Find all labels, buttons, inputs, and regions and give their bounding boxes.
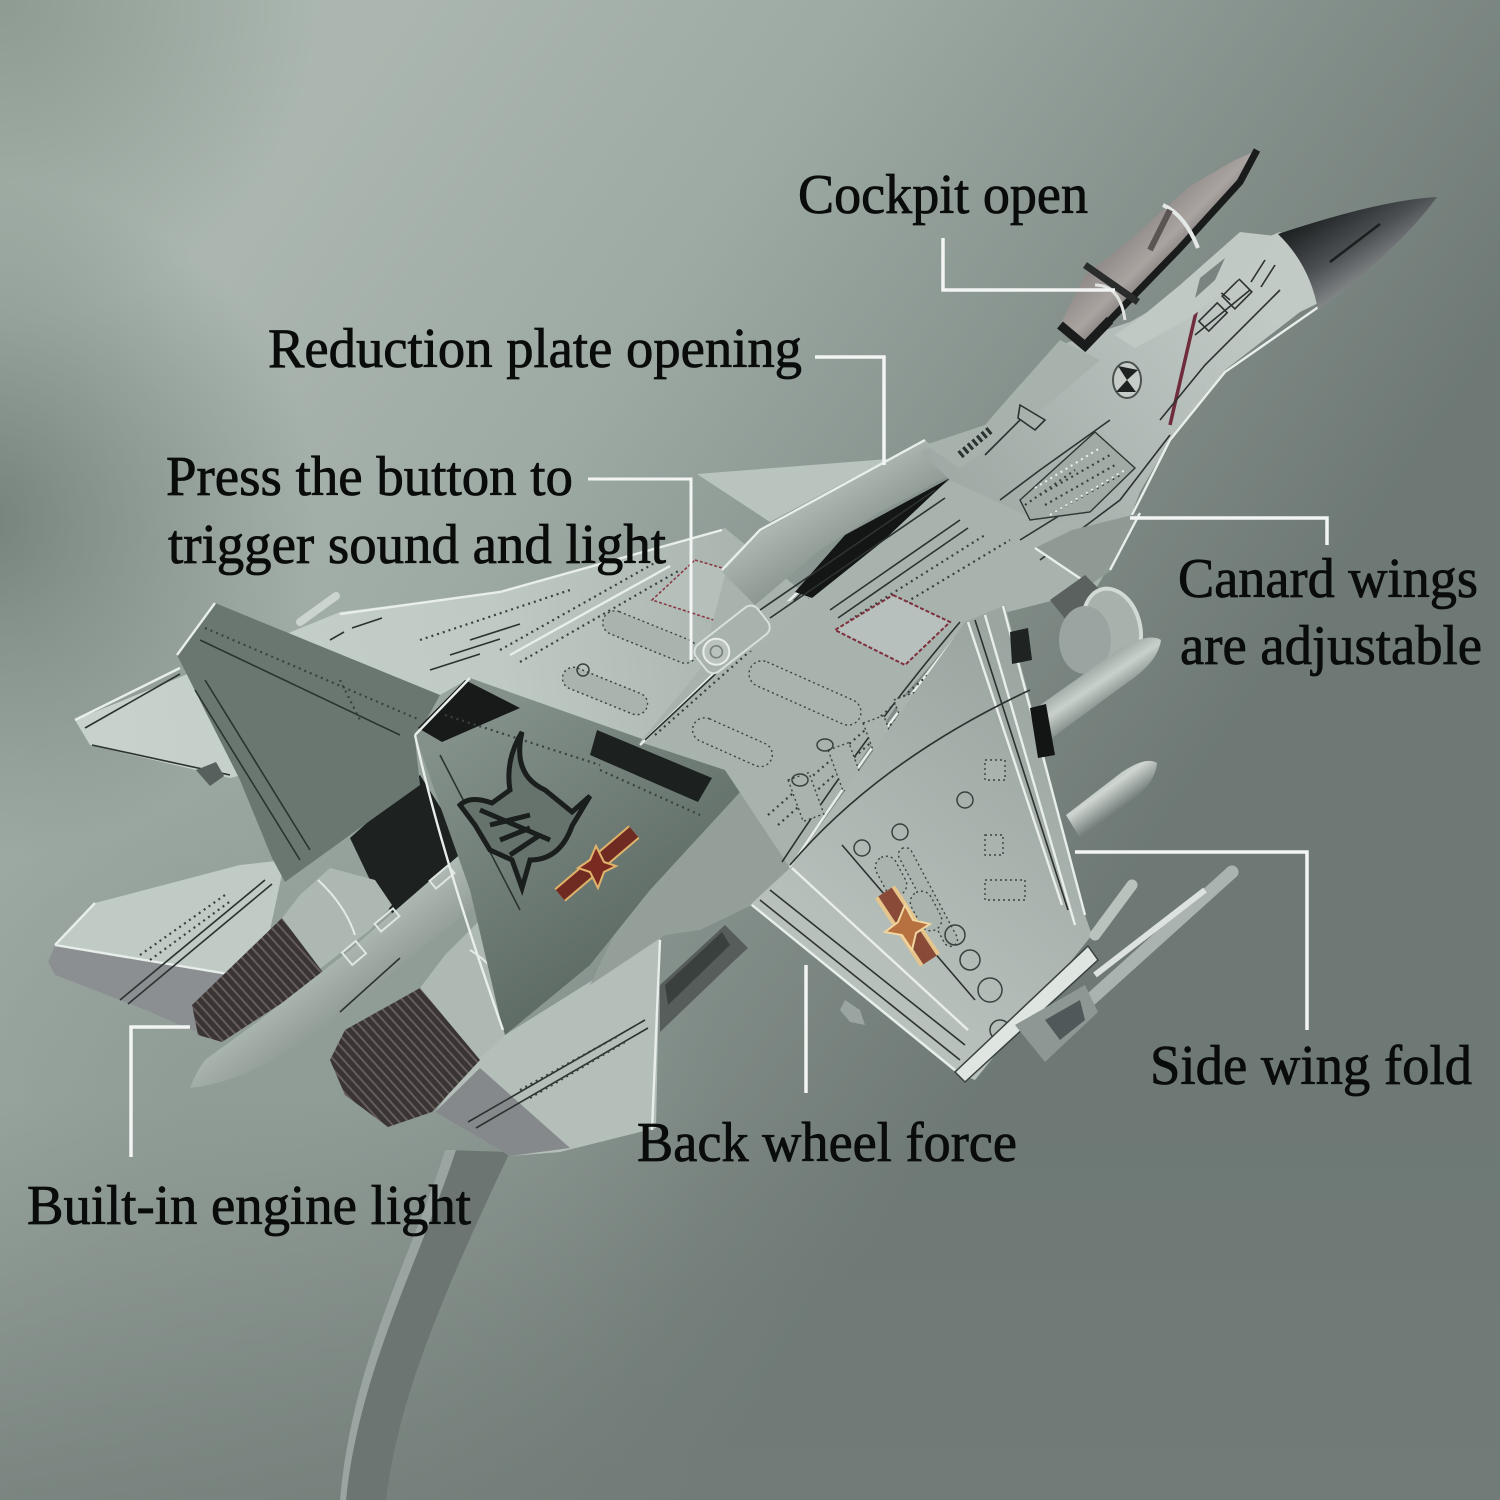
callout: canard wings: are adjustable bbox=[1180, 615, 1482, 677]
shark emblem bbox=[460, 732, 590, 888]
under-wing dark box bbox=[660, 925, 748, 1032]
right engine exhaust bbox=[330, 988, 480, 1127]
dark engine bay bbox=[350, 775, 480, 925]
left wing bbox=[75, 528, 800, 778]
landing gear and wheel bbox=[1050, 575, 1149, 674]
callout: built-in engine light: Built-in engine light bbox=[27, 1175, 471, 1237]
fuselage roundel bbox=[1113, 362, 1141, 398]
callout: cockpit open bbox=[798, 164, 1115, 290]
missile lower bbox=[1066, 761, 1157, 838]
red star insignia bbox=[560, 832, 634, 895]
callout: cockpit open: Cockpit open bbox=[798, 164, 1088, 226]
right engine nacelle bbox=[420, 920, 535, 1060]
callout: press the button bbox=[166, 446, 691, 660]
callout: press the button: trigger sound and light bbox=[168, 514, 666, 576]
callout: canard wings bbox=[1130, 518, 1482, 677]
open cockpit canopy bbox=[1060, 150, 1275, 348]
left stabilizer bbox=[48, 860, 285, 1032]
wing star insignia bbox=[885, 892, 930, 960]
callout: side wing fold: Side wing fold bbox=[1150, 1035, 1472, 1097]
wingtip missile rail bbox=[840, 872, 1232, 1082]
center fuselage and wing root bbox=[640, 480, 1140, 868]
missile upper bbox=[1030, 638, 1161, 758]
callout: back wheel force: Back wheel force bbox=[637, 1112, 1017, 1174]
wing panels bbox=[854, 760, 1025, 1040]
rear pylon parts behind left fin bbox=[196, 596, 336, 786]
radome nose cone bbox=[1278, 197, 1437, 310]
right tail fin with emblem bbox=[415, 678, 742, 1035]
callout: reduction plate opening bbox=[268, 318, 884, 465]
callout: built-in engine light bbox=[27, 1027, 471, 1237]
canard wing bbox=[1035, 513, 1140, 585]
tail boom bbox=[190, 850, 490, 1088]
air brake hump bbox=[697, 440, 960, 665]
callout: press the button: Press the button to bbox=[166, 446, 573, 508]
display stand bbox=[340, 1150, 510, 1500]
near stabilizer and ventral fin bbox=[435, 938, 660, 1156]
sound and light button bbox=[691, 602, 773, 677]
left tail fin bbox=[177, 603, 440, 882]
left engine nacelle bbox=[282, 868, 392, 975]
rear fuselage shoulder bbox=[590, 770, 795, 985]
wing root panels bbox=[689, 657, 978, 821]
aircraft model bbox=[48, 150, 1437, 1156]
callout: side wing fold bbox=[1075, 852, 1472, 1097]
wing panels bbox=[330, 560, 770, 718]
left engine exhaust bbox=[192, 918, 325, 1042]
main near wing with insignia bbox=[750, 605, 1092, 1080]
callout: reduction plate opening: Reduction plate opening bbox=[268, 318, 802, 380]
forward fuselage bbox=[920, 232, 1345, 560]
intake grid panels bbox=[1020, 432, 1135, 520]
callout: canard wings: Canard wings bbox=[1178, 548, 1478, 610]
